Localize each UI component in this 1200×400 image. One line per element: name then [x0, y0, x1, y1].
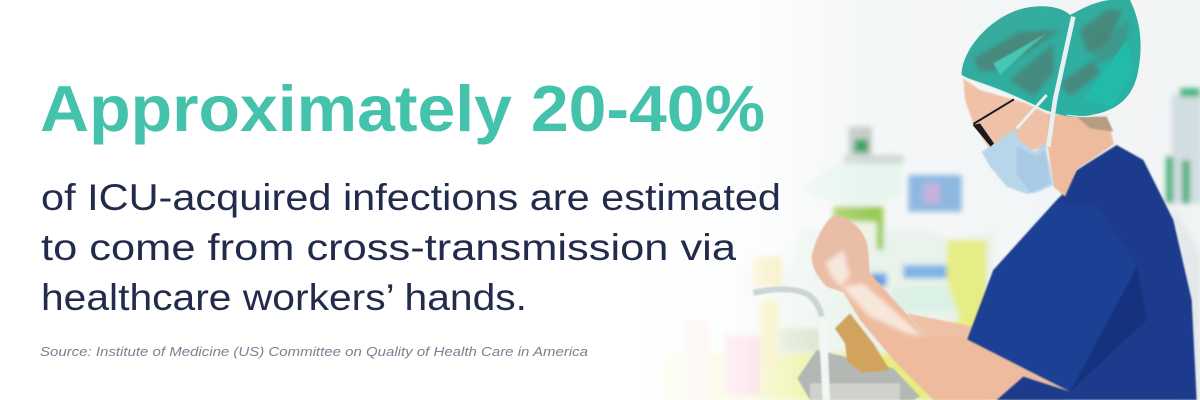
lower hand	[835, 313, 973, 373]
equipment on the counter	[660, 88, 1200, 400]
soap foam on the arm	[825, 250, 923, 337]
body text	[41, 177, 781, 318]
body text: healthcare workers’ hands.	[41, 277, 527, 318]
hair cap	[962, 0, 1141, 117]
neck and face	[963, 78, 1114, 197]
faucet and tray	[753, 289, 920, 400]
forearm and fist	[812, 215, 1080, 400]
photo background: blurred clinic room	[620, 0, 1200, 400]
glasses	[973, 99, 1014, 147]
scrub top	[967, 145, 1197, 400]
body text: to come from cross-transmission via	[41, 227, 736, 268]
body text: of ICU-acquired infections are estimated	[41, 177, 781, 218]
surgical mask	[982, 128, 1053, 194]
title: Approximately 20-40%	[40, 72, 765, 145]
fade from white over the photo	[620, 0, 870, 400]
right equipment	[1172, 95, 1200, 203]
source note: Source: Institute of Medicine (US) Committee on Quality of Health Care in America	[40, 344, 588, 359]
nurse washing her hands	[753, 0, 1197, 400]
mask straps	[1017, 17, 1073, 147]
